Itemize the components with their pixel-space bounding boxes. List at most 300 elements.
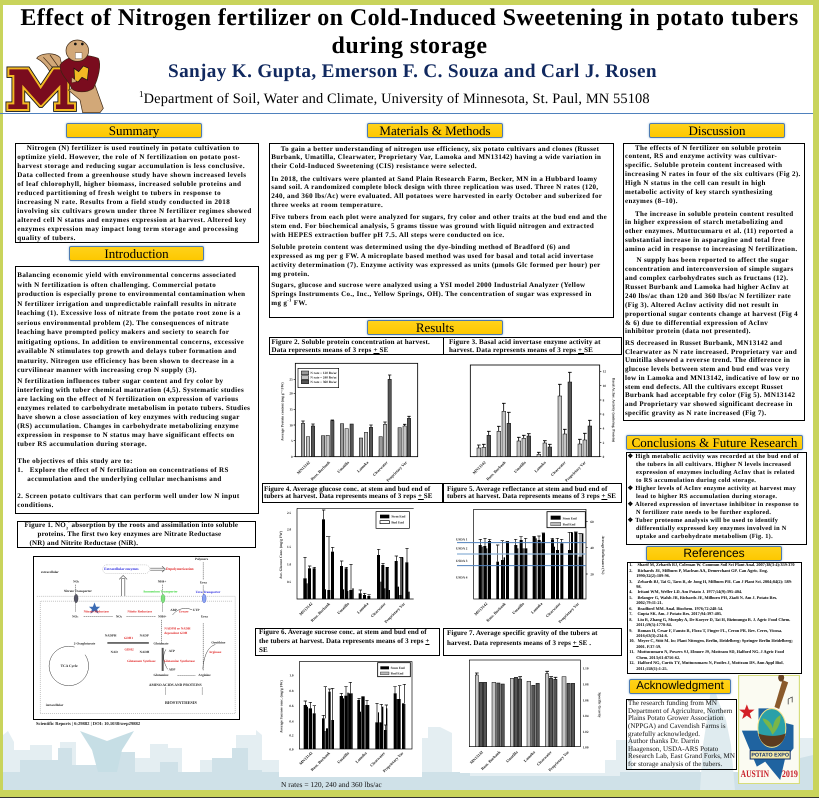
figure 1 diagram: nitrate assimilation pathway: Glutamate Synthase xyxy=(127,659,156,663)
figure 3 caption text: harvest. Data represents means of 3 reps + SE xyxy=(449,346,593,354)
bar chart: figure 7 specific gravity: 1.06 xyxy=(583,699,588,702)
figure 1 diagram: nitrate assimilation pathway: Ornithine xyxy=(211,641,225,645)
heading: Results: Results xyxy=(416,320,454,335)
introduction objectives xyxy=(17,457,229,483)
figure 1 caption text: (NR) and Nitrite Reductase (NiR). xyxy=(30,539,138,547)
heading: Discussion: Discussion xyxy=(688,123,746,138)
figure 1 diagram: nitrate assimilation pathway: NO xyxy=(73,580,78,584)
methods text: stem end. For biochemical analysis, 5 grams tissue was ground with liquid nitrogen and extracted xyxy=(271,222,594,230)
title xyxy=(20,5,799,59)
bar chart: figure 3 basal acid invertase xyxy=(470,364,616,482)
methods text xyxy=(271,144,601,170)
figure 2 caption text: Data represents means of 3 reps + SE xyxy=(272,346,388,354)
references list: 3. Zebarth BJ, Tai G, Tarn R, de Jong H, Milburn PH. Can J Plant Sci. 2004;84(2): 589- xyxy=(629,579,792,584)
bar chart: figure 4 glucose: 2.0 xyxy=(287,528,291,532)
references list xyxy=(629,562,794,671)
introduction paragraph 1: mitigating options. In addition to environmental concerns, excessive xyxy=(17,338,244,346)
introduction objectives: The objectives of this study are to: xyxy=(17,457,133,465)
acknowledgment text: Plains Potato Grower Association xyxy=(628,714,724,722)
figure 1 diagram: nitrate assimilation pathway: NH4+ xyxy=(158,615,167,619)
discussion text: (Fig 3). Altered AcInv activity did not result in xyxy=(625,301,779,309)
frame: top band xyxy=(0,0,819,5)
introduction paragraph 1 xyxy=(17,271,245,374)
introduction paragraph 1: N fertilizer irrigation and unpredictable rainfall results in nitrate xyxy=(17,300,237,308)
introduction paragraph 2: are lacking on the effect of N fertilization on expression of various xyxy=(17,395,238,403)
bar chart: figure 2 soluble protein: Clearwater xyxy=(372,460,389,477)
methods text: 240, and 360 lbs/Ac) were evaluated. All potatoes were harvested in early October and suberized for xyxy=(271,192,602,200)
figure 1 diagram: nitrate assimilation pathway: AMINO ACIDS AND PROTEINS xyxy=(149,683,202,687)
methods text: Sugars, glucose and sucrose were analyzed using a YSI model 2000 Industrial Analyzer (Yellow xyxy=(271,281,585,289)
figure 3 caption text xyxy=(449,338,601,354)
figure 1 diagram: nitrate assimilation pathway: intracellular xyxy=(46,704,64,707)
summary text: enzymes expression may impact long term storage and processing xyxy=(17,225,238,233)
discussion text: High N status in the cell can result in high xyxy=(625,179,766,187)
bar chart: figure 4 glucose: Proprietary Var xyxy=(383,601,406,624)
discussion text: stem end defects. All the cultivars except Russet xyxy=(625,383,783,391)
summary text: involving six cultivars grown under three N fertilizer regimes showed xyxy=(17,207,252,215)
heading: Conclusions & Future Research: Conclusions & Future Research xyxy=(632,435,797,450)
bar chart: figure 5 reflectance: USDA 4 xyxy=(456,576,467,580)
figure 7 caption text: Figure 7. Average specific gravity of the tubers at xyxy=(447,629,598,637)
discussion text xyxy=(625,339,800,417)
bar chart: figure 2 soluble protein: 0 xyxy=(291,455,293,459)
figure 1 diagram: nitrate assimilation pathway: Urea xyxy=(200,581,207,585)
bar chart: figure 6 sucrose xyxy=(279,661,422,777)
introduction paragraph 1: serious environmental problem (2). The consequences of nitrate xyxy=(17,318,229,326)
figure 1 diagram: nitrate assimilation pathway: NO3 xyxy=(72,615,78,619)
bar chart: figure 4 glucose: Bud End xyxy=(391,521,404,525)
figure 1 diagram: nitrate assimilation pathway: 3 xyxy=(78,580,79,583)
figure 6 caption text: the tubers at harvest. Data represents means of 3 reps + xyxy=(259,637,429,645)
discussion text: proportional sugar contents change at harvest (Fig 4 xyxy=(625,310,798,318)
bar chart: figure 6 sucrose: Stem End xyxy=(391,666,405,670)
discussion text: concentration and interconversion of simple sugars xyxy=(625,265,794,273)
figure 7 caption text: harvest. Data represents means of 3 reps + SE . xyxy=(447,638,591,646)
bar chart: figure 4 glucose: Lamoka xyxy=(356,601,369,615)
bar chart: figure 3 basal acid invertase: 8 xyxy=(603,399,604,402)
acknowledgment text xyxy=(628,699,735,768)
bar chart: figure 6 sucrose: Lamoka xyxy=(354,751,368,764)
bar chart: figure 3 basal acid invertase: Clearwater xyxy=(550,460,567,477)
bar chart: figure 7 specific gravity: 1.00 xyxy=(583,746,588,749)
conclusions list: ❖ Tuber proteome analysis will be used to identify xyxy=(628,517,778,524)
discussion text xyxy=(625,256,798,335)
figure 1 diagram: nitrate assimilation pathway: NAD xyxy=(111,651,118,654)
figure 1 diagram: nitrate assimilation pathway: Glutamine Synthetase xyxy=(164,659,195,663)
logo: Minnesota M and gopher mascot xyxy=(6,40,104,113)
figure 1 diagram: nitrate assimilation pathway: Arginase xyxy=(209,651,222,654)
figure 1 diagram: nitrate assimilation pathway: Nitrate Transporter xyxy=(64,589,92,593)
discussion text: Russet Burbank and Lamoka had higher AcInv at xyxy=(625,283,789,291)
bar chart: figure 7 specific gravity: 1.08 xyxy=(583,683,588,686)
introduction paragraph 1: available N stimulates top growth and delays tuber formation and xyxy=(17,347,237,355)
summary text: Data collected from a greenhouse study have shown increased levels xyxy=(17,171,246,179)
bar chart: figure 4 glucose: Ave. Glucose Conc. (mg/g FW) xyxy=(279,531,283,579)
heading: Results xyxy=(367,320,503,335)
discussion text: and complex carbohydrates such as fructans (12). xyxy=(625,274,788,282)
bar chart: figure 6 sucrose: 0.2 xyxy=(289,734,294,738)
heading: Acknowledgment xyxy=(629,679,731,694)
heading: Summary: Summary xyxy=(109,123,159,138)
bar chart: figure 6 sucrose: Average Sucrose conc. (mg/g FW) xyxy=(280,680,284,733)
bar chart: figure 6 sucrose: 0.8 xyxy=(289,689,294,693)
figure 1 diagram: nitrate assimilation pathway xyxy=(33,556,240,720)
conclusions list: ❖ Altered expression of invertase inhibitor in response to xyxy=(628,501,799,508)
figure 1 diagram: nitrate assimilation pathway: NADPH or NADH xyxy=(164,627,190,630)
introduction paragraph 1: with N fertilization is often challenging. Commercial potato xyxy=(17,280,216,288)
references list: 5. Belanger G, Walsh JR, Richards JE, Milburn PH, Ziadi N. Am J. Potato Res. xyxy=(629,595,777,600)
acknowledgment text: for storage analysis of the tubers. xyxy=(628,760,722,768)
bar chart: figure 3 basal acid invertase: 4 xyxy=(603,427,604,431)
methods text: Springs Instruments Co., Inc., Yellow Springs, OH). The concentration of sugar was expressed in xyxy=(271,290,592,298)
bar chart: figure 7 specific gravity: 1.04 xyxy=(583,714,588,718)
divider under header xyxy=(0,113,813,114)
bar chart: figure 3 basal acid invertase: Russ. Burbank xyxy=(485,460,507,481)
bar chart: figure 5 reflectance: Lamoka xyxy=(530,601,543,615)
figure 1 diagram: nitrate assimilation pathway: NH4+ xyxy=(158,580,166,584)
heading: Acknowledgment: Acknowledgment xyxy=(636,680,724,692)
bar chart: figure 5 reflectance: USDA 2 xyxy=(456,547,467,551)
bar chart: figure 4 glucose: Umatilla xyxy=(336,601,350,615)
summary text: optimize yield. However, the role of N fertilization on potato post- xyxy=(17,153,240,161)
figure 1 diagram: nitrate assimilation pathway: NO2 xyxy=(116,615,122,619)
references list: 98. xyxy=(636,584,642,589)
panel: conclusions xyxy=(626,452,807,545)
references list: 4. Iritani WM, Weller LD. Am Potato J. 1977;54(9):395-404. xyxy=(629,589,742,594)
bar chart: figure 6 sucrose: 0.0 xyxy=(289,748,294,751)
methods text xyxy=(271,174,602,209)
discussion text: increasing N rates in four of the six cultivars (Fig 2). xyxy=(625,170,801,178)
bar chart: figure 6 sucrose: Russ. Burbank xyxy=(310,751,331,772)
figure 1 diagram: nitrate assimilation pathway: ATP xyxy=(169,650,175,653)
bar chart: figure 6 sucrose: 1.0 xyxy=(289,674,294,677)
logo: Potato Expo Austin 2019: AUSTIN xyxy=(741,768,769,779)
figure 1 diagram: nitrate assimilation pathway: Urea xyxy=(201,615,208,619)
bar chart: figure 5 reflectance: 60 xyxy=(590,520,594,524)
discussion text: substantial increase in asparagine and total free xyxy=(625,236,785,244)
discussion text: 240 lbs/ac than 120 and 360 lbs/ac N fertilizer rate xyxy=(625,292,791,300)
references list: 2011;59(5):1778-84. xyxy=(636,622,672,627)
introduction objectives: accumulation and the underlying cellular mechanisms and xyxy=(27,475,222,483)
references list: 2001. P.37-59. xyxy=(636,644,661,649)
panel: summary xyxy=(15,143,259,243)
methods text: activity determination (7). Enzyme activity was expressed as units (µmols Glc formed per hour) per xyxy=(271,261,601,269)
figure 1 diagram: nitrate assimilation pathway: 2-Oxoglutarate xyxy=(74,642,95,645)
figure 1 caption text xyxy=(24,520,238,547)
figure 1 diagram: nitrate assimilation pathway: UTP xyxy=(193,608,200,612)
figure 7 caption text xyxy=(447,629,598,647)
affiliation: 1Department of Soil, Water and Climate, University of Minnesota, St. Paul, MN 55108 xyxy=(139,89,650,107)
bar chart: figure 3 basal acid invertase: 0 xyxy=(603,455,604,459)
acknowledgment text: Author thanks Dr. Darrin xyxy=(628,737,699,745)
bar chart: figure 2 soluble protein: N rate = 240 lbs/ac xyxy=(310,376,337,380)
figure 1 diagram: nitrate assimilation pathway: NADPH xyxy=(105,634,117,637)
introduction paragraph 1: curvilinear manner with increasing crop N supply (3). xyxy=(17,366,197,374)
bar chart: figure 4 glucose: MN13142 xyxy=(298,601,313,616)
authors: Sanjay K. Gupta, Emerson F. C. Souza and Carl J. Rosen xyxy=(168,61,657,82)
title: Effect of Nitrogen fertilizer on Cold-Induced Sweetening in potato tubers xyxy=(20,5,799,31)
bar chart: figure 7 specific gravity: MN13142 xyxy=(469,750,484,765)
figure 1 diagram: nitrate assimilation pathway: NADP xyxy=(140,634,149,637)
references list: 1990;32(2):189-96. xyxy=(636,573,670,578)
figure 4 caption text xyxy=(264,484,432,500)
bar chart: figure 3 basal acid invertase: Umatilla xyxy=(513,460,527,474)
discussion text: enzymes (8–10). xyxy=(625,197,678,205)
bar chart: figure 7 specific gravity: Umatilla xyxy=(505,750,519,764)
conclusions list: ❖ High metabolic activity was recorded at the bud end of xyxy=(628,453,799,460)
introduction objective 2 xyxy=(17,492,240,509)
conclusions list: ❖ Higher levels of AcInv enzyme activity at harvest may xyxy=(628,485,796,492)
discussion text xyxy=(625,144,801,205)
figure 4 caption xyxy=(262,483,443,503)
bar chart: figure 4 glucose: Stem End xyxy=(391,515,405,519)
figure 1 diagram: nitrate assimilation pathway: Nitrate Reductase xyxy=(84,610,109,614)
discussion text: metabolic activity of key starch synthesizing xyxy=(625,188,773,196)
discussion text: content, RS and enzyme activity was cultivar- xyxy=(625,152,777,160)
figure 3 caption text: Figure 3. Basal acid invertase enzyme activity at xyxy=(449,338,601,346)
figure 2 caption text xyxy=(272,338,430,354)
summary text: harvest storage and reducing sugar accumulation is less conclusive. xyxy=(17,162,245,170)
figure 1 diagram: nitrate assimilation pathway: ADP xyxy=(169,668,175,671)
conclusions list: differentially expressed key enzymes involved in N xyxy=(636,525,787,532)
conclusions list: to RS accumulation during cold storage. xyxy=(636,477,756,484)
methods text xyxy=(271,281,592,307)
introduction paragraph 1: maturity. Nitrogen use efficiency has been shown to decrease in a xyxy=(17,356,234,364)
figure 1 caption xyxy=(17,521,256,548)
discussion text: Clearwater as N rate increased. Proprietary var and xyxy=(625,348,797,356)
figure 1 diagram: nitrate assimilation pathway: Urease xyxy=(179,610,189,614)
bar chart: figure 6 sucrose: Bud End xyxy=(391,672,404,676)
bar chart: figure 5 reflectance: Bud End xyxy=(563,523,576,527)
introduction objective 2: conditions. xyxy=(17,501,54,509)
figure 5 caption text: tubers at harvest. Data represents means of 3 reps + SE xyxy=(447,492,616,500)
bar chart: figure 2 soluble protein: MN13142 xyxy=(296,460,311,475)
references list: Chem. 2013;61:8756-62. xyxy=(636,655,680,660)
references list: 12. Halford NG, Curtis TY, Muttucumaru N, Postles J, Mottram DS. Ann Appl Biol. xyxy=(629,660,784,665)
summary text: quality of tubers. xyxy=(17,234,76,242)
references list: 7. Gupta SK. Am. J Potato Res. 2017;94:397-405. xyxy=(629,611,722,616)
introduction paragraph 1: leaching have prompted policy makers and society to search for xyxy=(17,328,229,336)
methods text: their Cold-Induced Sweetening (CIS) resistance were selected. xyxy=(271,162,477,170)
references list: 2016;63(3):234-8. xyxy=(636,633,668,638)
bar chart: figure 7 specific gravity: Proprietary Var xyxy=(547,750,570,772)
discussion text: Burbank had acceptable fry color (Fig 5). MN13142 xyxy=(625,391,795,399)
introduction paragraph 2: N fertilization influences tuber sugar content and fry color by xyxy=(17,377,223,385)
note: N rates: N rates = 120, 240 and 360 lbs/ac xyxy=(281,780,382,788)
summary text: of leaf chlorophyll, higher biomass, increased soluble proteins and xyxy=(17,180,241,188)
summary text xyxy=(17,144,252,242)
references list: 6. Bradford MM. Anal. Biochem. 1976;72:248-54. xyxy=(629,606,723,611)
figure 6 caption text: SE xyxy=(259,646,268,654)
bar chart: figure 7 specific gravity: Russ. Burbank xyxy=(480,750,501,771)
heading: Materials & Methods: Materials & Methods xyxy=(379,123,491,138)
figure 3 caption xyxy=(443,337,622,355)
bar chart: figure 5 reflectance: 20 xyxy=(590,573,594,576)
bar chart: figure 3 basal acid invertase: 10 xyxy=(603,384,606,388)
discussion text: RS decreased in Russet Burbank, MN13142 and xyxy=(625,339,782,347)
figure 4 caption text: Figure 4. Average glucose conc. at stem and bud end of xyxy=(264,484,430,492)
methods text: expressed as mg per g FW. A microplate based method was used for basal and total acid invertase xyxy=(271,252,594,260)
bar chart: figure 2 soluble protein: Lamoka xyxy=(356,460,369,473)
bar chart: figure 2 soluble protein: Umatilla xyxy=(336,460,350,474)
bar chart: figure 2 soluble protein: 10 xyxy=(289,424,293,427)
acknowledgment text: gratefully acknowledged. xyxy=(628,730,700,738)
introduction paragraph 1: Balancing economic yield with environmental concerns associated xyxy=(17,271,236,279)
figure 1 diagram: nitrate assimilation pathway: GDH2 xyxy=(124,648,134,652)
figure 2 caption xyxy=(269,337,444,355)
figure 4 caption text: tubers at harvest. Data represents means of 3 reps + SE xyxy=(264,492,432,500)
bar chart: figure 6 sucrose: Clearwater xyxy=(369,751,386,768)
bar chart: figure 2 soluble protein: 15 xyxy=(289,408,293,412)
introduction paragraph 2: tuber RS accumulation during storage. xyxy=(17,440,147,448)
panel: introduction xyxy=(15,266,259,514)
bar chart: figure 5 reflectance xyxy=(456,509,605,624)
references list: 1. Sharif M, Zebarth BJ, Coleman W. Commun Soil Sci Plant Anal. 2007;38(3-4):359-370 xyxy=(629,562,794,567)
bar chart: figure 3 basal acid invertase: 12 xyxy=(603,370,606,374)
methods text: Burbank, Umatilla, Clearwater, Proprietary Var, Lamoka and MN13142) having a wide variation in xyxy=(271,153,601,161)
bar chart: figure 5 reflectance: Average Reflectance (%) xyxy=(601,536,605,575)
introduction paragraph 2: enzymes related to carbohydrate metabolism in potato tubers. Studies xyxy=(17,404,250,412)
logo: Potato Expo Austin 2019 xyxy=(738,675,800,784)
figure 6 caption text: Figure 6. Average sucrose conc. at stem and bud end of xyxy=(259,628,427,636)
methods text: Soluble protein content was determined using the dye-binding method of Bradford (6) and xyxy=(271,243,570,251)
frame: left band xyxy=(0,0,3,797)
bar chart: figure 4 glucose: Russ. Burbank xyxy=(310,601,331,623)
introduction paragraph 1: leaching (1). Excessive loss of nitrate from the potato root zone is a xyxy=(17,309,241,317)
bar chart: figure 2 soluble protein xyxy=(281,362,418,482)
conclusions list: expression of enzymes including AcInv that is related xyxy=(636,469,795,476)
frame: bottom band xyxy=(0,790,819,798)
heading: Introduction: Introduction xyxy=(104,246,169,261)
bar chart: figure 2 soluble protein: 5 xyxy=(291,439,293,443)
bar chart: figure 6 sucrose: 0.4 xyxy=(289,720,294,723)
figure 1 diagram: nitrate assimilation pathway: dependent GDH xyxy=(164,631,187,635)
acknowledgment text: Haagenson, USDA-ARS Potato xyxy=(628,745,718,753)
references list: 8. Liu B, Zhang G, Murphy A, De Koeyer D, Tai H, Bizimungu B. J. Agric Food Chem. xyxy=(629,617,790,622)
bar chart: figure 4 glucose: 1.0 xyxy=(287,563,291,567)
figure 1 diagram: nitrate assimilation pathway: GDH1 xyxy=(124,636,133,640)
discussion text: Umitilla showed a reverse trend. The difference in xyxy=(625,356,790,364)
figure 1 diagram: nitrate assimilation pathway: Depolymerization xyxy=(166,567,194,571)
bar chart: figure 5 reflectance: Clearwater xyxy=(545,601,562,618)
bar chart: figure 5 reflectance: 40 xyxy=(590,546,594,550)
bar chart: figure 6 sucrose: 0.6 xyxy=(289,704,294,708)
figure 1 diagram: nitrate assimilation pathway: Polymers xyxy=(195,557,208,561)
bar chart: figure 5 reflectance: Proprietary Var xyxy=(557,601,580,624)
introduction paragraph 2: (RS) accumulation. Changes in carbohydrate metabolizing enzyme xyxy=(17,422,239,430)
heading: Introduction xyxy=(69,246,204,261)
conclusions list: lead to higher RS accumulation during storage. xyxy=(636,493,777,500)
bar chart: figure 2 soluble protein: N rate = 120 lbs/ac xyxy=(310,371,337,375)
bar chart: figure 6 sucrose: Umatilla xyxy=(336,751,350,765)
bar chart: figure 3 basal acid invertase: 6 xyxy=(603,413,604,416)
summary text: reduced partitioning of fresh weight to tubers in response to xyxy=(17,189,221,197)
heading: References xyxy=(646,546,782,561)
bar chart: figure 2 soluble protein: 20 xyxy=(289,392,293,396)
bar chart: figure 7 specific gravity: 1.02 xyxy=(583,730,588,734)
bar chart: figure 7 specific gravity xyxy=(460,660,605,773)
bar chart: figure 4 glucose: 0.5 xyxy=(287,580,291,584)
bar chart: figure 5 reflectance: USDA 3 xyxy=(456,559,467,563)
bar chart: figure 3 basal acid invertase: 2 xyxy=(603,441,604,445)
figure 1 diagram: nitrate assimilation pathway: Extracellular enzymes xyxy=(104,567,139,571)
discussion text: The increase in soluble protein content resulted xyxy=(635,210,793,218)
frame: right band xyxy=(813,0,819,797)
heading: Summary xyxy=(66,123,202,138)
logo: Potato Expo Austin 2019: POTATO EXPO xyxy=(751,752,789,758)
methods text xyxy=(271,213,607,239)
bar chart: figure 7 specific gravity: Clearwater xyxy=(536,750,553,767)
figure 1 diagram: nitrate assimilation pathway: Glutamine xyxy=(153,674,169,677)
bar chart: figure 5 reflectance: Umatilla xyxy=(511,601,525,615)
conclusions list xyxy=(628,453,799,540)
introduction objective 2: 2. Screen potato cultivars that can perform well under low N input xyxy=(17,492,240,500)
methods text: In 2018, the cultivars were planted at Sand Plain Research Farm, Becker, MN in a Hubbard loamy xyxy=(271,174,597,182)
discussion text: and Proprietary var showed significant decrease in xyxy=(625,400,793,408)
heading: Discussion xyxy=(649,123,785,138)
figure 1 diagram: nitrate assimilation pathway: extracellular xyxy=(41,570,59,574)
discussion text: amino acid in response to increasing N fertilization. xyxy=(625,245,797,253)
methods text: with HEPES extraction buffer pH 7.5. All steps were conducted on ice. xyxy=(271,231,504,239)
discussion text: N supply has been reported to affect the sugar xyxy=(636,256,789,264)
panel: discussion xyxy=(623,143,805,421)
bar chart: figure 4 glucose: 2.5 xyxy=(287,511,291,515)
bar chart: figure 4 glucose: 1.5 xyxy=(287,545,291,549)
figure 1 diagram: nitrate assimilation pathway: Nitrite Reductase xyxy=(127,610,152,614)
bar chart: figure 6 sucrose: MN13142 xyxy=(298,751,313,766)
conclusions list: uptake and carbohydrate metabolism (Fig. 1). xyxy=(636,533,773,540)
conclusions list: N fertilizer rate needs to be further explored. xyxy=(636,509,771,516)
methods text: mg g-1 FW. xyxy=(271,298,307,307)
figure 7 caption xyxy=(443,628,622,656)
figure 5 caption text xyxy=(447,484,616,500)
discussion text: other enzymes. Muttucumaru et al. (11) reported a xyxy=(625,227,793,235)
figure 1 caption text: proteins. The first two key enzymes are Nitrate Reductase xyxy=(38,530,221,538)
acknowledgment text: Department of Agriculture, Northern xyxy=(628,707,732,715)
bar chart: figure 4 glucose: Clearwater xyxy=(370,601,387,618)
references list: 9. Roman H, Cesar F, Fausto R, Flora T, Finger FL, Ceron PR. Rev. Ceres, Vicosa. xyxy=(629,628,782,633)
bar chart: figure 2 soluble protein: Russ. Burbank xyxy=(310,460,331,481)
acknowledgment text: (NPPGA) and Cavendish Farms is xyxy=(628,722,726,730)
discussion text: specific gravity as N rate increased (Fig 7). xyxy=(625,409,766,417)
heading: References: References xyxy=(683,546,745,560)
panel: acknowledgment xyxy=(626,699,737,770)
bar chart: figure 5 reflectance: USDA 1 xyxy=(456,538,467,542)
discussion text: glucose levels between stem and bud end was very xyxy=(625,365,789,373)
references list: 10. Meyer C, Stitt M. In: Plant Nitrogen. Berlin, Heidelberg: Springer Berlin Heidelberg; xyxy=(629,638,793,643)
methods text xyxy=(271,243,601,278)
methods text: Five tubers from each plot were analyzed for sugars, fry color and other traits at the bud end and the xyxy=(271,213,607,221)
references list: 2. Richards JE, Milburn P, Maclean AA, Demerchant GP. Can Agric. Eng. xyxy=(629,568,768,573)
references list: 2002;79:11-21. xyxy=(636,600,663,605)
bar chart: figure 7 specific gravity: 1.10 xyxy=(583,667,588,671)
introduction paragraph 2 xyxy=(17,377,250,448)
bar chart: figure 7 specific gravity: Specific Gravity xyxy=(598,692,602,718)
bar chart: figure 2 soluble protein: Average Protein content (mg g⁻¹ FW) xyxy=(281,382,285,441)
discussion text: in higher expression of starch metabolizing and xyxy=(625,218,783,226)
references list: 11. Muttucumaru N, Powers SJ, Elmore JS, Mottram SD, Halford NG. J Agric Food xyxy=(629,649,784,654)
methods text: sand soil. A randomized complete block design with three replication was used. Three N rates (120, xyxy=(271,183,598,191)
bar chart: figure 5 reflectance: Stem End xyxy=(563,517,577,520)
figure 1 diagram: nitrate assimilation pathway: ABP xyxy=(170,608,177,612)
bar chart: figure 2 soluble protein: N rate = 360 lbs/ac xyxy=(310,380,337,384)
bar chart: figure 6 sucrose: Proprietary Var xyxy=(382,751,405,773)
figure 1 diagram: nitrate assimilation pathway: TCA Cycle xyxy=(61,664,78,668)
bar chart: figure 2 soluble protein: 25 xyxy=(289,378,293,382)
introduction paragraph 1: production is especially prone to environmental contamination when xyxy=(17,290,245,298)
bar chart: figure 7 specific gravity: Lamoka xyxy=(523,750,536,763)
figure 5 caption text: Figure 5. Average reflectance at stem and bud end of xyxy=(447,484,607,492)
